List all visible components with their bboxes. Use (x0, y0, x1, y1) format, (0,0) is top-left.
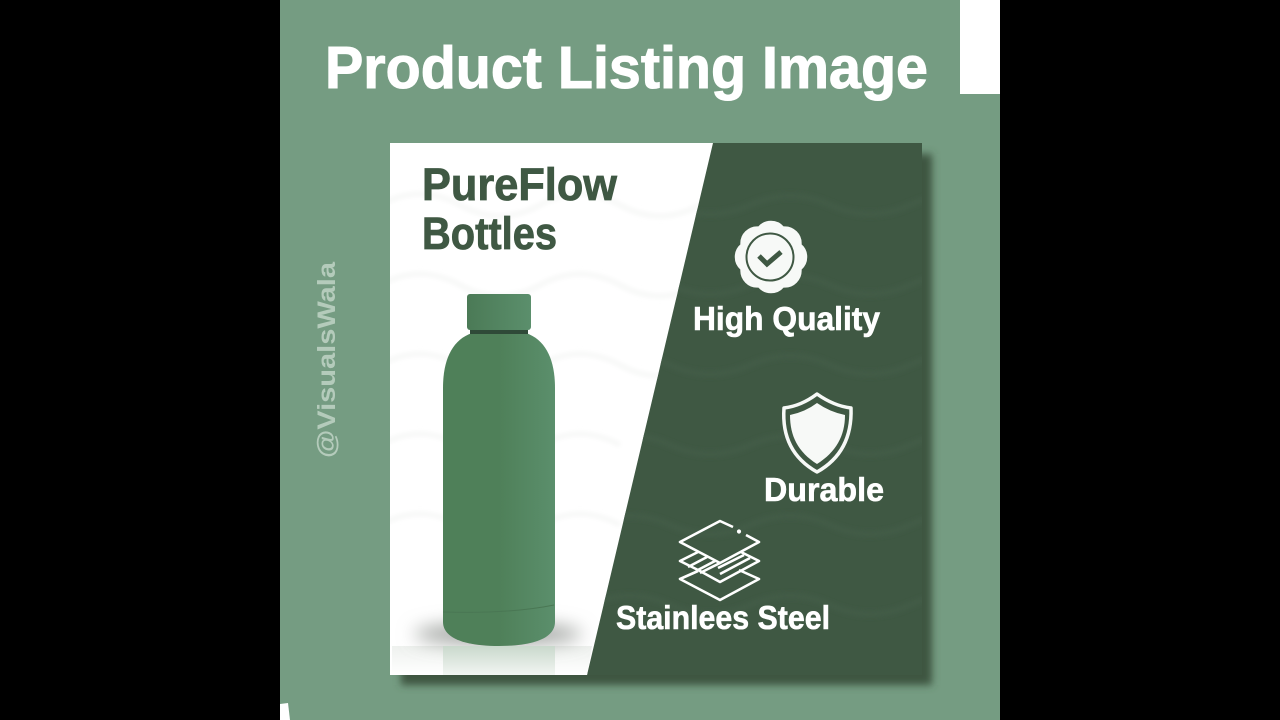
brand name: Bottles (422, 208, 557, 259)
green background (280, 0, 1000, 720)
icon: quality seal (736, 222, 806, 292)
feature: high quality (693, 222, 881, 337)
title: Product Listing Image (325, 35, 928, 101)
floor shadow (414, 623, 582, 645)
panel: product card (380, 143, 990, 685)
neck ring (470, 328, 528, 334)
watermark: @VisualsWala (313, 261, 341, 458)
floor reflection (443, 646, 555, 675)
dark side (587, 143, 922, 675)
label: high quality: High Quality (693, 300, 881, 337)
floor tint (392, 646, 592, 675)
base seam (443, 605, 554, 612)
panel shadow (401, 154, 932, 685)
bottle (392, 294, 592, 675)
feature: stainless steel (616, 521, 830, 636)
white side (390, 143, 922, 675)
label: stainlees steel: Stainlees Steel (616, 599, 830, 636)
bottle body (443, 333, 555, 646)
feature: durable (764, 394, 884, 508)
white corner block (960, 0, 1000, 94)
white side wave pattern (657, 202, 699, 379)
white corner fragment (280, 703, 290, 720)
brand name: PureFlow (422, 159, 618, 210)
bottle cap (467, 294, 531, 330)
icon: layers (680, 521, 759, 600)
brand name (422, 159, 618, 259)
icon: shield (784, 394, 851, 472)
label: durable: Durable (764, 471, 884, 508)
infographic slide (280, 0, 1000, 720)
dark side wave pattern (604, 208, 698, 604)
